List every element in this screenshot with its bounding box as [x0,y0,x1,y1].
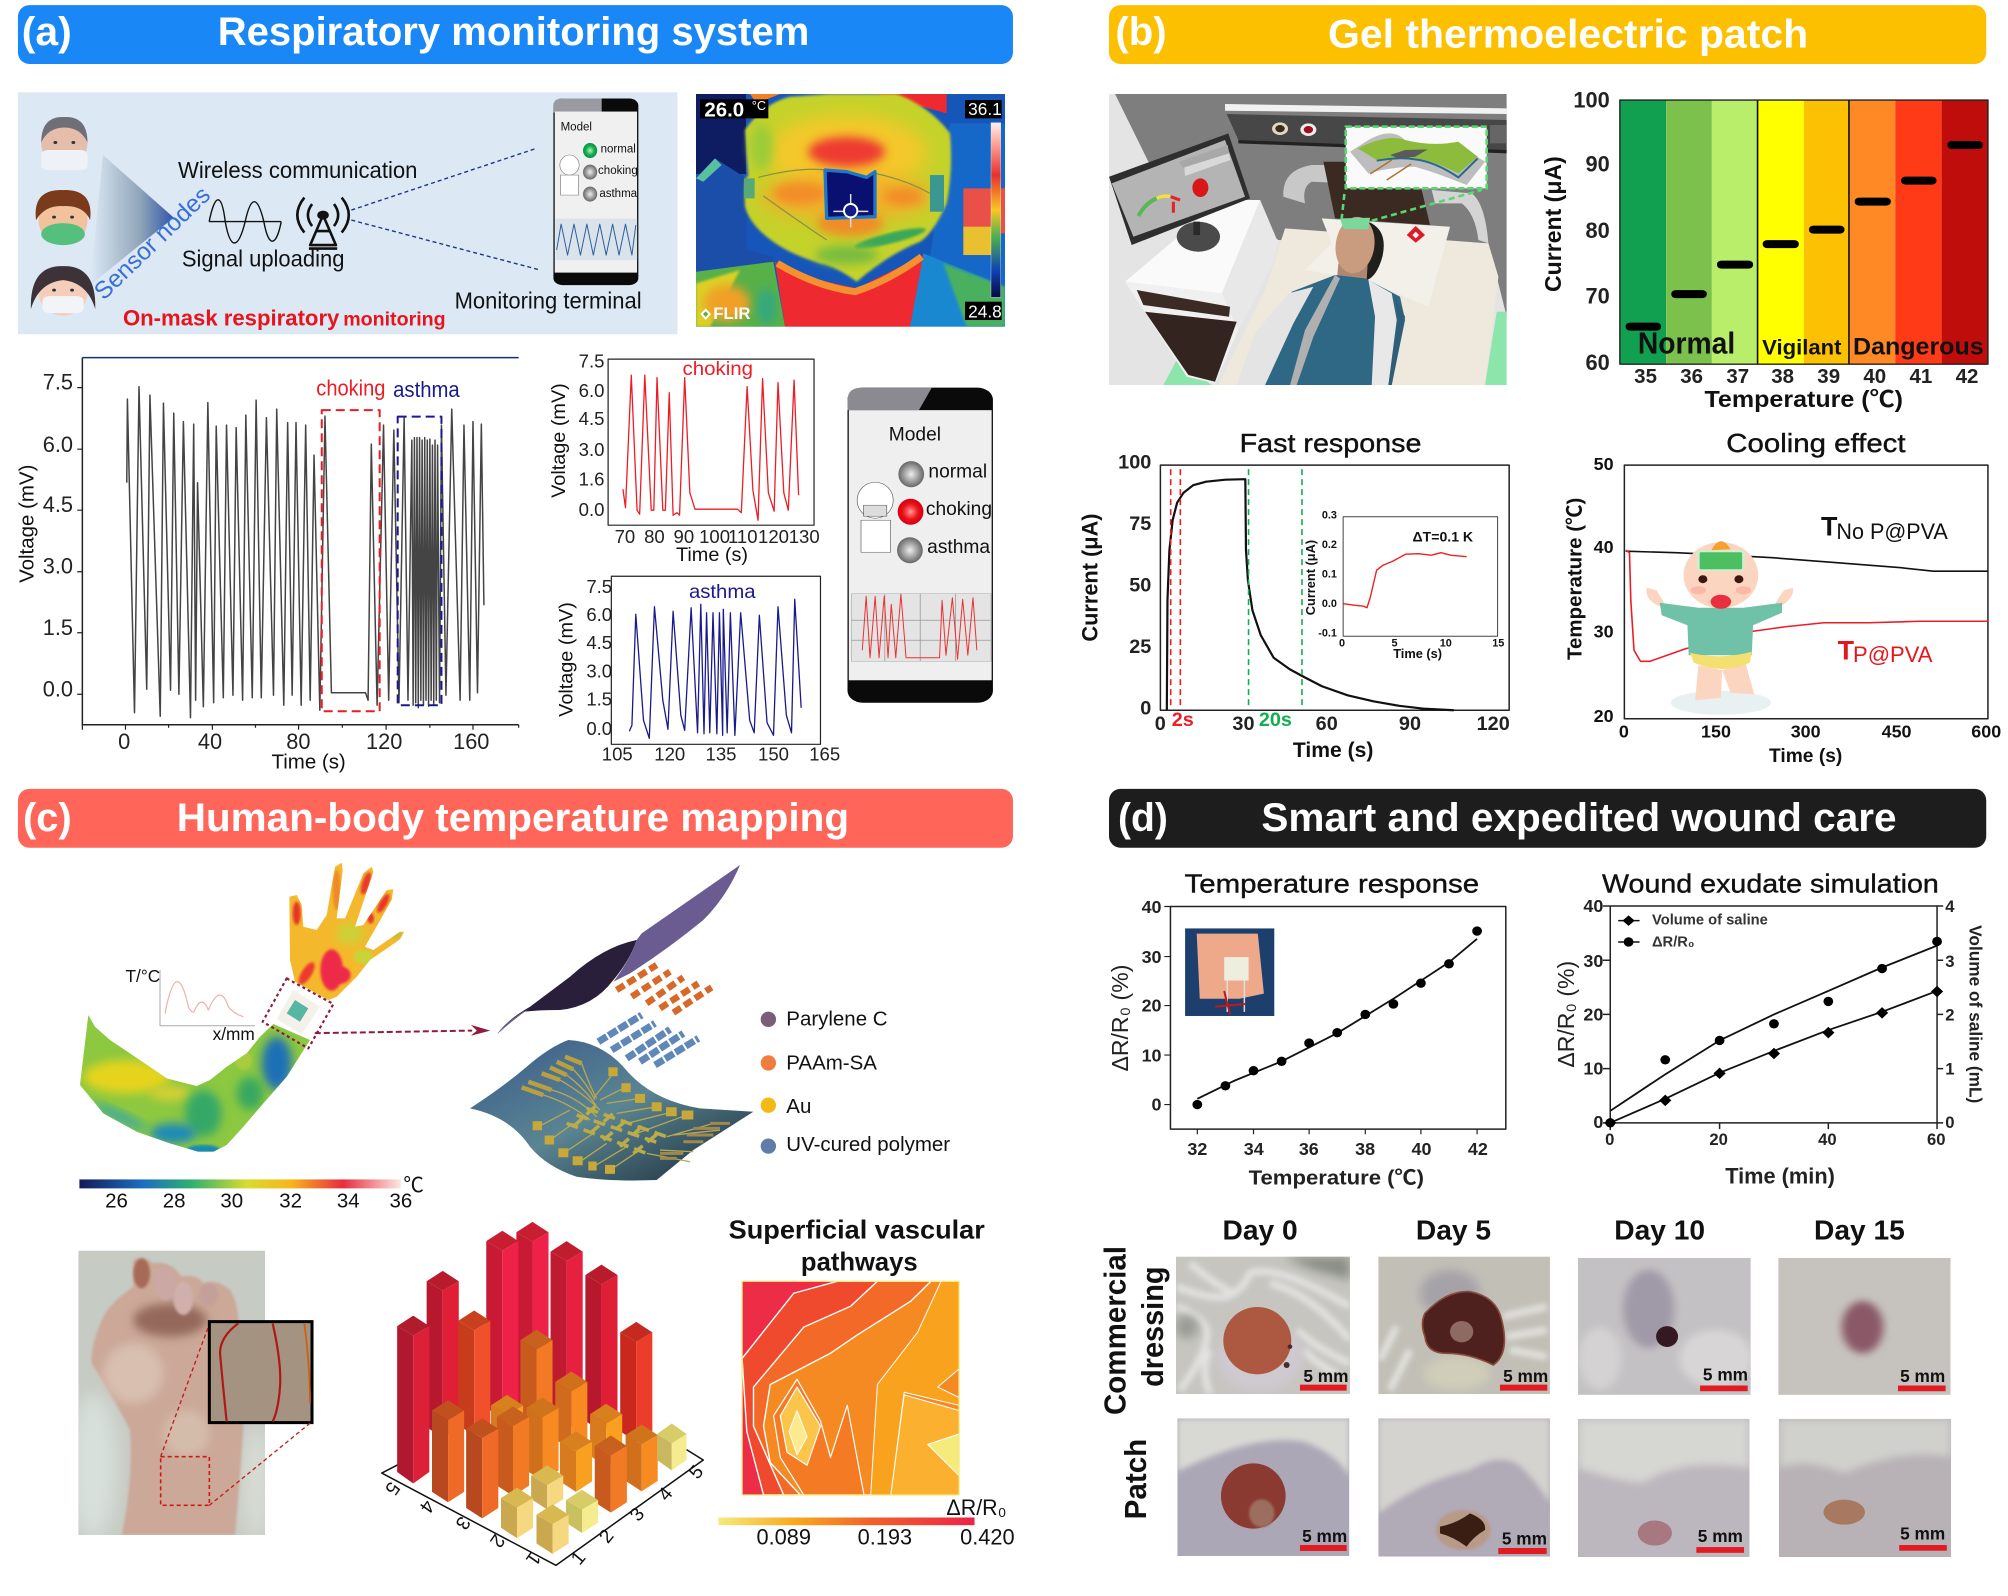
choking chart: choking [683,358,753,380]
fast response chart: 90 [1399,713,1421,735]
asthma chart [555,576,840,765]
patch day 10 [1578,1419,1750,1557]
cooling effect chart: No P@PVA [1836,519,1948,544]
heading c [18,789,1013,848]
main voltage chart: 3.0 [43,554,73,579]
temperature response chart: 42 [1468,1139,1488,1159]
fast response chart: 0.3 [1322,510,1337,522]
label: on-mask monitoring: On-mask respiratory [123,305,339,330]
cooling effect chart: P@PVA [1853,642,1933,667]
cooling effect chart: 50 [1594,454,1614,474]
fast response chart: 60 [1316,713,1338,735]
fast response chart [1077,430,1510,762]
heading b: Gel thermoelectric patch [1328,12,1808,56]
choking chart: 90 [674,526,694,547]
fast response chart: Time (s) [1293,739,1373,762]
panel c: human-body temperature mapping [18,789,1015,1569]
day column labels: Day 0 [1223,1214,1298,1246]
temperature zones bar chart: Current (μA) [1540,156,1566,292]
temperature colour bar: 36 [389,1190,412,1213]
temperature response chart: ΔR/R₀ (%) [1107,965,1133,1072]
cooling effect chart: 300 [1791,722,1821,742]
contour colour scale: 0.420 [960,1524,1015,1549]
inset photo [1185,928,1274,1016]
temperature zones bar chart: 36 [1680,365,1703,388]
main voltage chart: 40 [198,729,222,754]
temperature zones bar chart: Dangerous [1853,334,1984,361]
thermal image of mask: 26.0 [704,99,744,122]
main voltage chart: 1.5 [43,615,73,640]
temperature zones bar chart: 38 [1771,365,1794,388]
asthma chart: Voltage (mV) [555,602,577,717]
3D bar chart: 1 [567,1548,590,1569]
icon: baby with patch [1646,541,1793,715]
temperature zones bar chart: Temperature (℃) [1704,386,1903,412]
choking chart: 80 [644,526,665,547]
large phone showing choking: choking [926,499,992,520]
cooling effect chart: 450 [1882,722,1912,742]
fast response chart: 20s [1259,709,1292,731]
thermal image of mask: 36.1 [968,99,1002,119]
choking chart: 0.0 [579,499,604,520]
heading a: (a) [22,10,72,54]
arrow: wrist to layers [315,1025,490,1036]
asthma chart: 4.5 [586,632,612,653]
choking chart: 4.5 [579,408,604,429]
temperature response chart: 0 [1152,1094,1162,1114]
temperature colour bar: 34 [337,1190,360,1213]
choking chart: 70 [615,526,635,547]
temperature response chart: 34 [1244,1139,1264,1159]
temperature response chart: Temperature (℃) [1249,1167,1424,1190]
cooling effect chart: Cooling effect [1726,430,1906,458]
wound exudate chart: 0 [1593,1112,1603,1132]
temperature response chart: 40 [1142,897,1162,917]
temperature zones bar chart: 41 [1910,365,1932,388]
fast response chart: 0.2 [1322,539,1337,551]
wound exudate chart: 3 [1945,952,1955,971]
day column labels: Day 10 [1614,1214,1705,1246]
wound exudate chart: Wound exudate simulation [1602,871,1939,899]
small phone [553,99,638,285]
cooling effect chart: T [1821,511,1838,541]
main voltage chart: 0.0 [43,677,73,702]
temperature zones bar chart [1540,88,1988,412]
main voltage chart: 80 [286,729,310,754]
wound exudate chart: 2 [1945,1006,1955,1025]
temperature response chart: 38 [1355,1139,1375,1159]
system schematic [18,92,677,334]
row labels: dressing [1135,1267,1170,1387]
contour colour scale [718,1495,1015,1549]
wound exudate chart: Volume of saline (mL) [1966,925,1986,1103]
asthma chart: 1.5 [586,689,612,710]
temperature zones bar chart: 37 [1726,365,1749,388]
choking chart: Voltage (mV) [548,383,570,498]
choking chart [548,351,820,566]
temperature colour bar: 28 [163,1190,186,1213]
fast response chart: 15 [1492,638,1504,650]
vascular contour map: Superficial vascular [729,1216,985,1244]
temperature colour bar: 30 [220,1190,243,1213]
sensor node triangle and faces [31,117,541,316]
choking chart: 7.5 [579,351,604,372]
3D bar chart: 2 [485,1530,509,1551]
wound exudate chart: 20 [1709,1130,1728,1149]
main voltage chart: 120 [366,729,402,754]
commercial day 5 [1378,1257,1550,1394]
layer legend: Au [786,1095,811,1118]
patch day 0 [1177,1418,1349,1556]
heading b: (b) [1115,10,1167,54]
choking chart: 6.0 [579,380,604,401]
temperature colour bar: ℃ [403,1174,424,1197]
wound exudate chart: 20 [1583,1005,1603,1025]
vascular contour map: pathways [801,1248,918,1276]
fast response chart: 120 [1477,713,1510,735]
label: signal uploading: Signal uploading [182,245,344,271]
heading c: Human-body temperature mapping [177,796,849,840]
row labels: Patch [1118,1439,1153,1519]
wound exudate chart: Time (min) [1725,1163,1835,1188]
temperature zones bar chart: Vigilant [1762,337,1842,360]
wound photo grid: 5 mm [1900,1523,1945,1543]
asthma chart: 105 [602,744,633,765]
label: monitoring: monitoring [343,309,446,330]
thermal arm map: T/°C [125,966,160,986]
panel b: gel thermoelectric patch [1077,5,2001,767]
temperature zones bar chart: 100 [1573,88,1610,113]
panel d: smart and expedited wound care [1098,789,1986,1557]
asthma chart: 0.0 [586,718,612,739]
wound photo grid: 5 mm [1503,1366,1548,1386]
wound exudate chart: ΔR/R₀ (%) [1553,961,1579,1068]
small phone: normal [601,143,636,155]
large phone showing choking: Model [889,425,941,446]
patient in hospital bed illustration [1109,94,1507,385]
wound exudate chart: ΔR/R₀ [1652,934,1695,950]
main voltage chart: Time (s) [271,750,346,773]
small phone: Model [561,122,592,134]
wound photo grid [1175,1257,1951,1557]
fast response chart: Fast response [1240,430,1421,458]
3D bar chart: 2 [596,1526,618,1548]
cooling effect chart: T [1838,636,1855,666]
wound exudate chart: 0 [1605,1130,1614,1149]
wound exudate chart: 0 [1945,1113,1955,1132]
asthma chart: asthma [689,581,757,603]
fast response chart: Current (μA) [1077,513,1102,642]
wound photo grid: 5 mm [1698,1526,1743,1546]
temperature zones bar chart: 80 [1586,218,1610,243]
asthma chart: 3.0 [586,660,612,681]
3D bar chart: 3 [451,1512,474,1533]
cooling effect chart: 30 [1594,622,1614,642]
choking chart: 120 [758,526,789,547]
layer legend: PAAm-SA [786,1051,877,1074]
cooling effect chart: 40 [1594,537,1614,557]
asthma chart: 6.0 [586,604,612,625]
choking chart: 3.0 [579,439,604,460]
cooling effect chart: 0 [1619,722,1629,742]
3D bar chart: 5 [380,1478,404,1498]
temperature zones bar chart: 35 [1634,365,1657,388]
contour colour scale: ΔR/R₀ [946,1495,1007,1520]
asthma chart: 165 [809,744,840,765]
wound exudate chart: 60 [1927,1130,1946,1149]
temperature zones bar chart: 40 [1863,365,1886,388]
temperature response chart: 10 [1142,1046,1162,1066]
day column labels: Day 5 [1416,1214,1491,1246]
cooling effect chart: 20 [1594,706,1614,726]
contour colour scale: 0.193 [858,1524,912,1549]
row labels [1098,1246,1170,1519]
wound photo grid: 5 mm [1302,1526,1347,1546]
wound photo grid: 5 mm [1900,1366,1945,1386]
temperature response chart: 32 [1187,1139,1207,1159]
fast response chart: 5 [1392,638,1398,650]
temperature zones bar chart: 39 [1817,365,1840,388]
temperature response chart: Temperature response [1185,871,1479,899]
main voltage chart: 7.5 [43,369,73,394]
temperature colour bar: 32 [279,1190,302,1213]
wound exudate chart [1553,871,1986,1188]
temperature zones bar chart: Normal [1638,325,1735,360]
fast response chart: Current (μA) [1303,540,1318,615]
fast response chart: 50 [1129,575,1151,597]
wound exudate chart: 40 [1583,896,1603,916]
panel a: respiratory monitoring system [15,5,1013,773]
wound exudate chart: 10 [1583,1058,1603,1078]
fast response chart: -0.1 [1318,627,1337,639]
fast response chart: 0 [1140,698,1151,720]
wound photo grid: 5 mm [1303,1366,1348,1386]
choking chart: 110 [728,526,758,547]
heading d: Smart and expedited wound care [1261,796,1897,840]
thermal image of mask [696,94,1005,327]
temperature response chart: 40 [1412,1139,1431,1159]
fast response chart: 2s [1172,709,1194,731]
day column labels: Day 15 [1814,1214,1905,1246]
fast response chart: 10 [1440,638,1452,650]
wound exudate chart: 1 [1945,1059,1955,1078]
commercial day 15 [1778,1258,1950,1395]
temperature colour bar: 26 [105,1190,128,1213]
temperature zones bar chart: 42 [1956,365,1978,388]
wound photo grid: 5 mm [1502,1528,1547,1548]
heading a: Respiratory monitoring system [218,10,809,54]
3D bar chart [380,1222,708,1569]
heading b [1109,5,1986,64]
temperature response chart: 36 [1299,1139,1319,1159]
cooling effect chart: 150 [1701,722,1731,742]
fast response chart: ΔT=0.1 K [1413,529,1474,545]
temperature colour bar [79,1174,424,1213]
large phone showing choking [847,388,993,703]
choking chart: 1.6 [579,468,604,489]
label: sensor nodes: Sensor nodes [89,182,216,305]
row labels: Commercial [1098,1246,1133,1415]
fast response chart: 0 [1339,638,1345,650]
fast response chart: 25 [1129,636,1151,658]
main voltage chart: 160 [453,729,489,754]
fast response chart: 30 [1232,713,1255,735]
wound exudate chart: 40 [1818,1130,1837,1149]
main voltage chart: Voltage (mV) [15,465,38,583]
heading a [18,5,1013,64]
temperature response chart: 20 [1142,996,1162,1016]
scale bars right photos [1696,1386,1947,1553]
scale bars top-left photos [1300,1385,1547,1554]
main voltage chart: 4.5 [43,492,73,517]
cooling effect chart: 600 [1971,722,2001,742]
wound exudate chart: 30 [1583,951,1603,971]
3D bar chart: 1 [521,1548,544,1569]
patch day 15 [1779,1419,1951,1557]
wrist photo with inset [70,1251,312,1540]
temperature zones bar chart: 60 [1586,350,1610,375]
fast response chart: 75 [1129,513,1151,535]
cooling effect chart: Time (s) [1769,746,1842,767]
main voltage chart: choking [316,376,385,401]
asthma chart: 135 [706,744,736,765]
day column labels [1223,1214,1905,1246]
main voltage chart: asthma [393,377,461,402]
asthma chart: 150 [758,744,789,765]
temperature response chart [1107,871,1506,1190]
thermal image of mask: 24.8 [968,302,1002,322]
choking chart: 130 [789,526,820,547]
heading d: (d) [1118,796,1168,840]
layer legend [761,1008,950,1156]
wound exudate chart: 4 [1945,897,1955,916]
contour colour scale: 0.089 [757,1524,811,1549]
small phone: asthma [599,188,638,200]
main voltage chart: 6.0 [43,432,73,457]
3D bar chart: 4 [415,1496,438,1517]
exploded device layers [470,865,753,1180]
label: monitoring terminal: Monitoring terminal [455,288,642,314]
layer legend: UV-cured polymer [786,1133,950,1156]
fast response chart: 0 [1155,713,1166,735]
large phone showing choking: normal [928,462,987,483]
fast response chart: 0.1 [1322,569,1337,581]
asthma chart: 7.5 [586,576,612,597]
cooling effect chart [1564,430,2001,767]
choking chart: Time (s) [676,544,748,566]
3D bar chart: 5 [685,1462,708,1484]
heading d [1109,789,1986,848]
fast response chart: 100 [1118,452,1151,474]
layer legend: Parylene C [786,1008,888,1031]
fast response chart: 0.0 [1322,598,1337,610]
thermal arm map: x/mm [213,1024,255,1044]
choking chart: 100 [699,526,730,547]
vascular contour map [729,1216,985,1495]
temperature zones bar chart: 70 [1586,284,1610,308]
temperature zones bar chart: 90 [1586,152,1610,177]
commercial day 0 [1175,1257,1350,1394]
wound exudate chart: Volume of saline [1652,913,1768,929]
wound photo grid: 5 mm [1703,1364,1748,1384]
small phone: choking [598,165,638,177]
3D bar chart: 3 [626,1504,649,1526]
main voltage chart [15,358,519,773]
large phone showing choking: asthma [927,537,990,558]
3D bar chart: 4 [654,1483,678,1505]
thermal image of mask: °C [752,98,766,113]
commercial day 10 [1578,1258,1753,1395]
cooling effect chart: Temperature (℃) [1564,498,1587,660]
thermal arm map [77,860,410,1157]
temperature response chart: 30 [1142,947,1162,967]
main voltage chart: 0 [118,729,130,754]
label: wireless communication: Wireless communication [178,157,417,183]
fast response chart: Time (s) [1393,646,1442,661]
heading c: (c) [23,796,72,840]
thermal image of mask: FLIR [713,304,750,323]
patch day 5 [1378,1418,1550,1557]
asthma chart: 120 [654,744,685,765]
